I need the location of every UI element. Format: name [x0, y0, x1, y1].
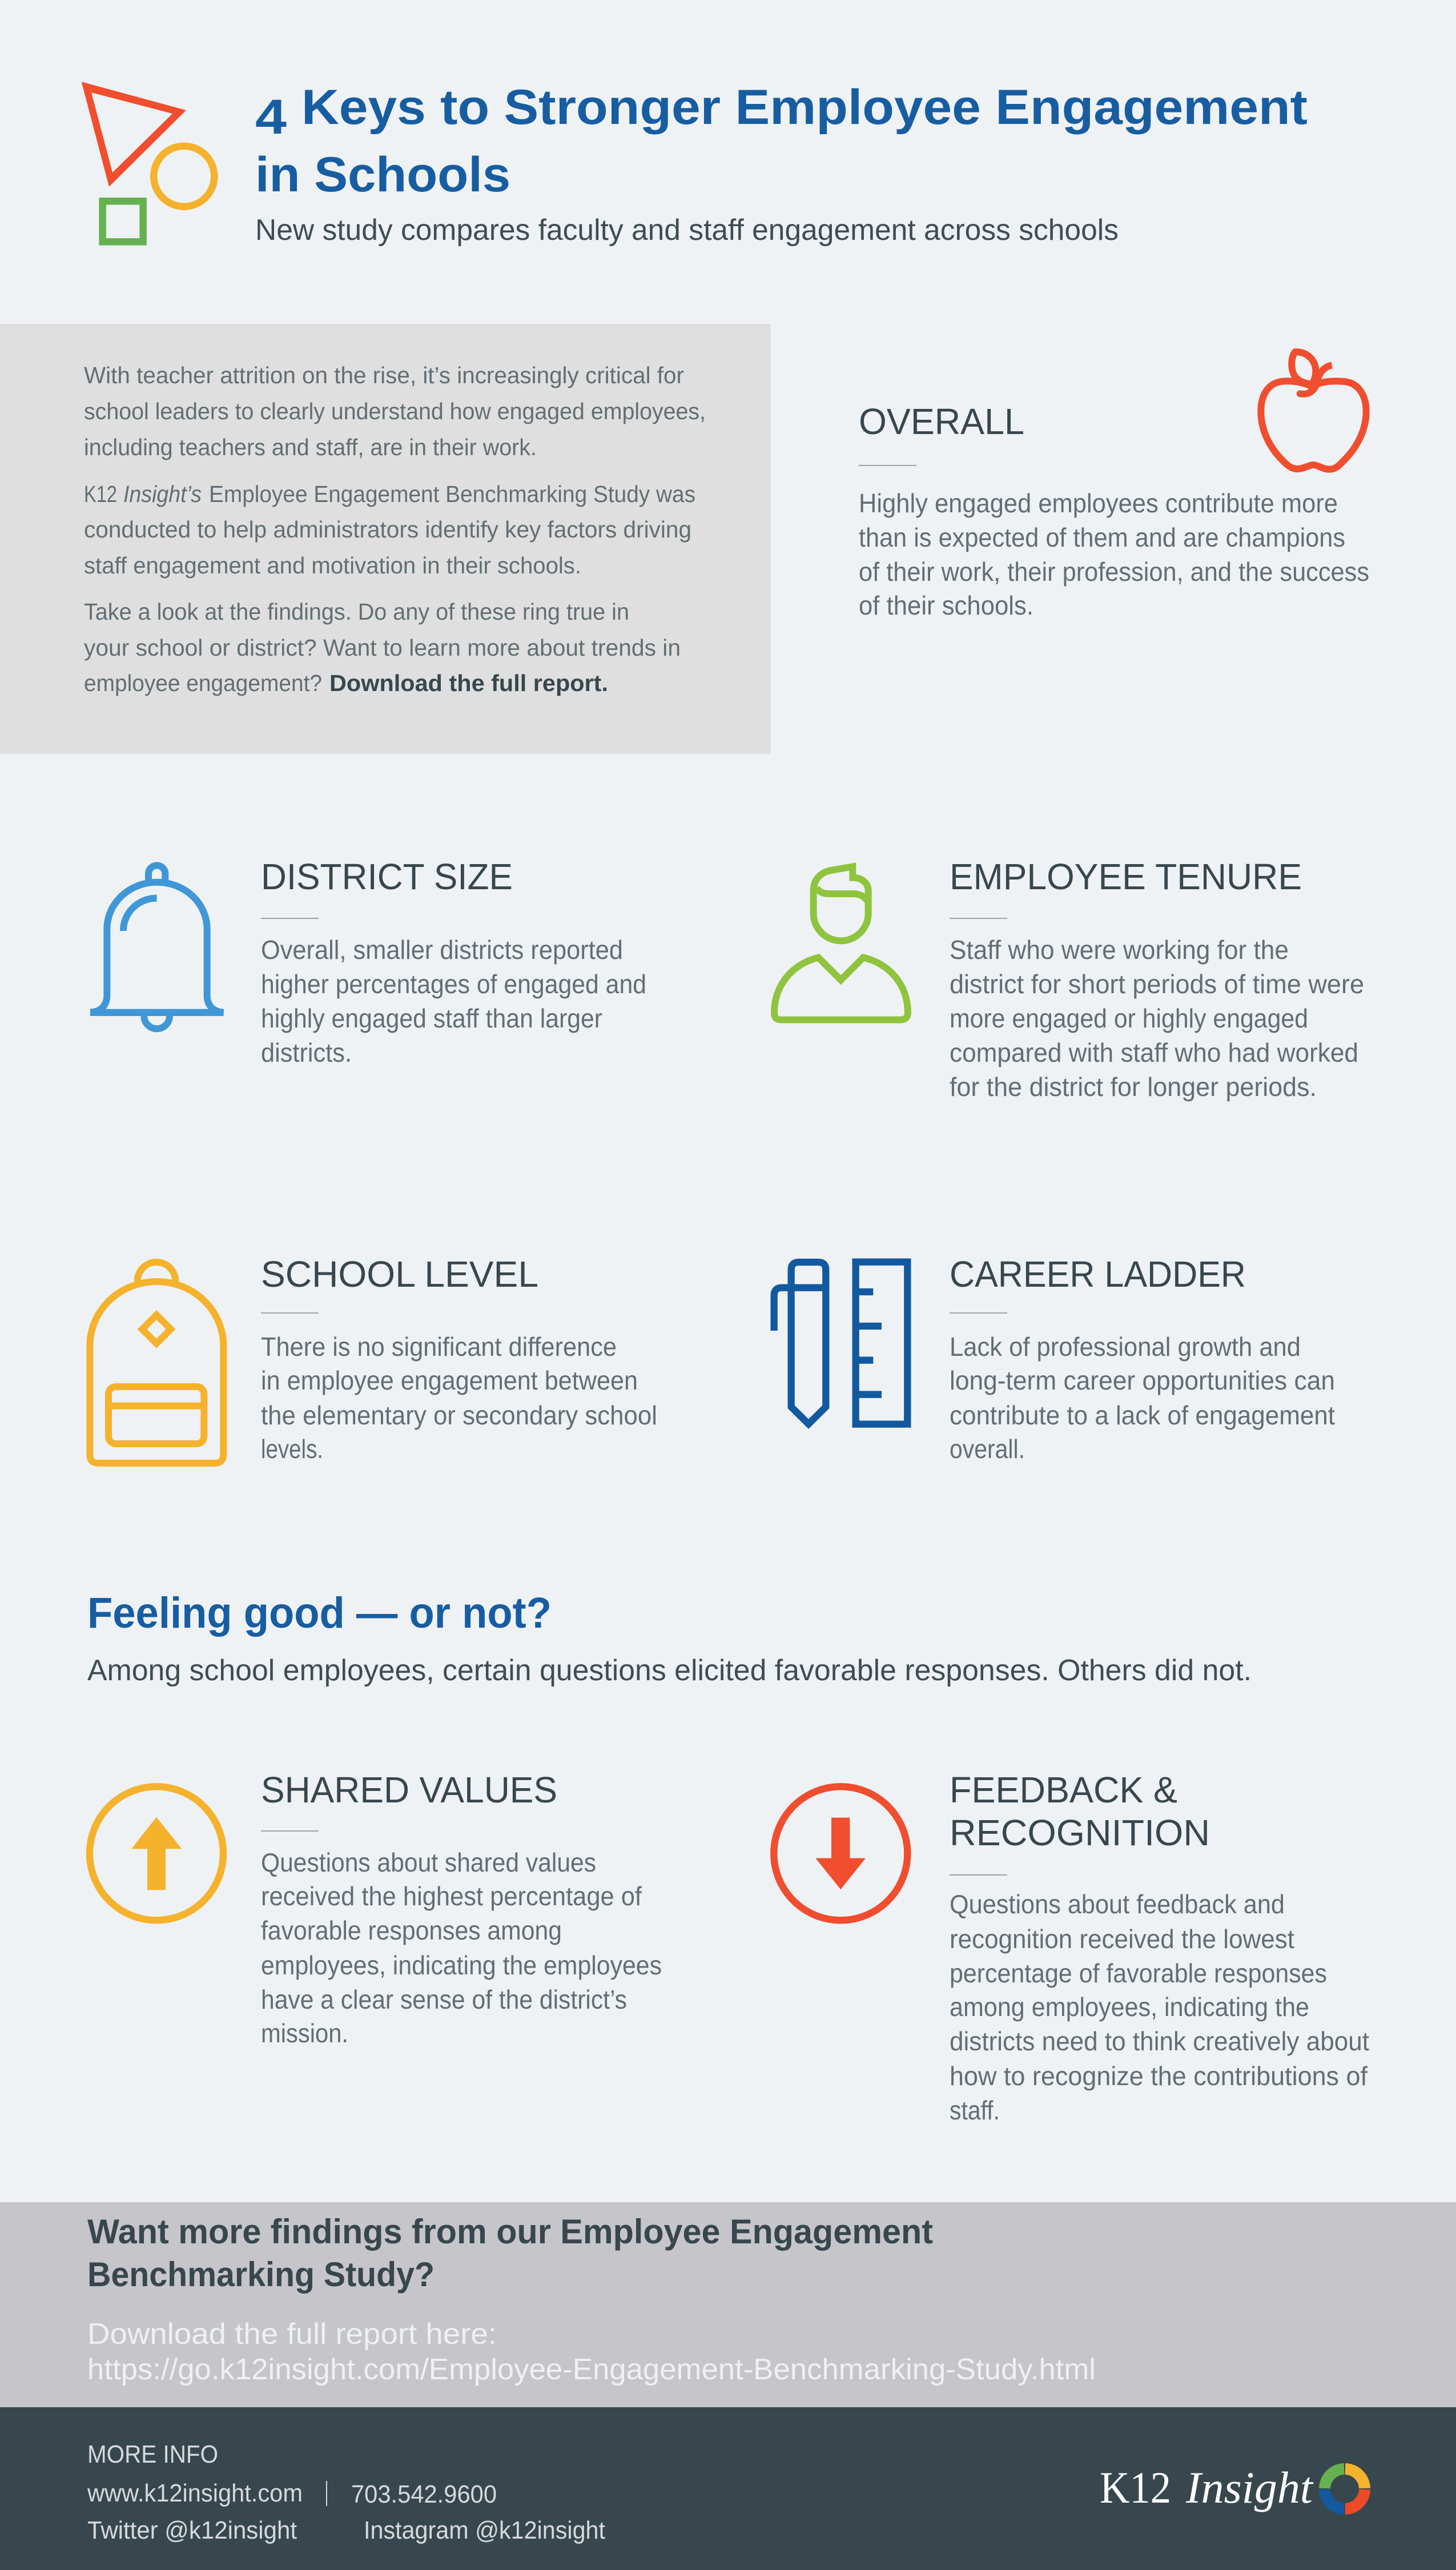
text: career ladder: Lack of professional growth and: [950, 1332, 1301, 1362]
icon: bell: [90, 865, 224, 1029]
intro paragraph 3: Download the full report.: [329, 670, 608, 696]
heading: feedback and recognition: RECOGNITION: [950, 1812, 1210, 1853]
footer contact details: www.k12insight.com: [87, 2479, 303, 2507]
footer contact details: Instagram @k12insight: [364, 2516, 605, 2544]
text: school level: levels.: [261, 1434, 323, 1464]
text: district size: districts.: [261, 1038, 352, 1067]
text: feedback and recognition: [950, 1889, 1369, 2125]
logo: K12 Insight: [1100, 2463, 1365, 2512]
text: shared values: favorable responses among: [261, 1916, 562, 1945]
text: shared values: received the highest percentage of: [261, 1881, 642, 1911]
heading: shared values: SHARED VALUES: [261, 1769, 557, 1810]
heading: school level: SCHOOL LEVEL: [261, 1254, 538, 1295]
text: feedback and recognition: percentage of favorable responses: [950, 1958, 1327, 1988]
intro paragraph 2: K12: [84, 481, 117, 507]
heading: career ladder: CAREER LADDER: [950, 1254, 1246, 1295]
icon: apple: [1261, 352, 1366, 469]
call to action heading: Want more findings from our Employee Engagement: [87, 2212, 933, 2251]
text: employee tenure: Staff who were working for the: [950, 935, 1289, 965]
panel: footer: [0, 2407, 1456, 2570]
text: feedback and recognition: how to recognize the contributions of: [950, 2061, 1367, 2091]
text: feedback and recognition: districts need to think creatively about: [950, 2026, 1369, 2056]
section heading: feeling good: Feeling good — or not?: [87, 1589, 552, 1637]
icon: person: [774, 866, 908, 1020]
call to action link: https://go.k12insight.com/Employee-Engagement-Benchmarking-Study.html: [87, 2353, 1096, 2386]
heading: employee tenure: EMPLOYEE TENURE: [950, 856, 1302, 897]
text: district size: highly engaged staff than larger: [261, 1003, 602, 1033]
intro paragraph 2: [84, 481, 695, 579]
text: employee tenure: compared with staff who had worked: [950, 1038, 1358, 1067]
text: feedback and recognition: recognition received the lowest: [950, 1924, 1294, 1954]
panel: intro: [0, 324, 771, 754]
footer contact details: MORE INFO: [87, 2440, 218, 2468]
text: shared values: Questions about shared values: [261, 1848, 596, 1877]
text: employee tenure: more engaged or highly engaged: [950, 1003, 1308, 1033]
panel: overall: [859, 352, 1369, 620]
call to action link: [87, 2318, 1096, 2386]
footer contact details: Twitter @k12insight: [87, 2516, 297, 2544]
text: career ladder: [950, 1332, 1335, 1464]
text: employee tenure: for the district for longer periods.: [950, 1072, 1317, 1102]
intro paragraph 1: [84, 362, 706, 460]
intro paragraph 2: staff engagement and motivation in their schools.: [84, 552, 581, 579]
text: school level: the elementary or secondary school: [261, 1400, 657, 1430]
intro paragraph 1: including teachers and staff, are in their work.: [84, 434, 537, 460]
intro paragraph 3: Take a look at the findings. Do any of these ring true in: [84, 599, 629, 625]
icon: backpack: [90, 1262, 223, 1463]
panel: career ladder: [774, 1254, 1335, 1464]
panel: feedback and recognition: [774, 1769, 1369, 2125]
intro paragraph 3: employee engagement?: [84, 670, 322, 696]
intro paragraph 2: Employee Engagement Benchmarking Study was: [209, 481, 695, 507]
text: shared values: have a clear sense of the district’s: [261, 1985, 627, 2014]
text: career ladder: overall.: [950, 1434, 1025, 1464]
text: employee tenure: district for short periods of time were: [950, 969, 1364, 999]
intro paragraph 1: With teacher attrition on the rise, it’s increasingly critical for: [84, 362, 684, 388]
text: overall: than is expected of them and are champions: [859, 523, 1345, 552]
title: [255, 80, 1308, 202]
text: district size: higher percentages of engaged and: [261, 969, 646, 999]
heading: feedback and recognition: [950, 1769, 1210, 1853]
text: shared values: mission.: [261, 2018, 348, 2048]
logo: K12 Insight: K12: [1100, 2463, 1171, 2512]
call to action link: Download the full report here:: [87, 2318, 497, 2351]
text: overall: [859, 488, 1369, 620]
subtitle: New study compares faculty and staff engagement across schools: [255, 214, 1119, 247]
heading: feedback and recognition: FEEDBACK &: [950, 1769, 1177, 1810]
intro paragraph 2: conducted to help administrators identify key factors driving: [84, 516, 691, 543]
panel: shared values: [90, 1769, 662, 2048]
section subheading: Among school employees, certain questions elicited favorable responses. Others did not.: [87, 1654, 1252, 1687]
icon: triangle, circle and square logo shapes: [82, 82, 214, 242]
call to action heading: [87, 2212, 933, 2294]
text: career ladder: contribute to a lack of engagement: [950, 1400, 1335, 1430]
panel: district size: [90, 856, 646, 1067]
panel: employee tenure: [774, 856, 1364, 1102]
text: school level: in employee engagement between: [261, 1366, 638, 1395]
intro paragraph 1: school leaders to clearly understand how engaged employees,: [84, 398, 706, 424]
icon: down arrow in circle: [774, 1786, 907, 1920]
intro paragraph 3: your school or district? Want to learn more about trends in: [84, 635, 681, 661]
heading: overall: OVERALL: [859, 401, 1024, 442]
text: overall: of their schools.: [859, 591, 1033, 620]
call to action heading: Benchmarking Study?: [87, 2255, 435, 2294]
title: in Schools: [255, 147, 510, 202]
footer contact details: [87, 2440, 605, 2544]
intro paragraph 3: [84, 599, 681, 696]
title: Keys to Stronger Employee Engagement: [301, 80, 1308, 135]
logo: K12 Insight: Insight: [1185, 2463, 1314, 2512]
text: district size: Overall, smaller districts reported: [261, 935, 623, 965]
text: feedback and recognition: Questions about feedback and: [950, 1889, 1285, 1919]
text: shared values: [261, 1848, 662, 2048]
title: 4: [255, 90, 287, 144]
intro paragraph 2: Insight’s: [123, 481, 202, 507]
text: feedback and recognition: among employees, indicating the: [950, 1992, 1309, 2022]
text: employee tenure: [950, 935, 1364, 1102]
icon: up arrow in circle: [90, 1786, 223, 1920]
text: shared values: employees, indicating the employees: [261, 1950, 662, 1980]
icon: pen and ruler: [774, 1262, 907, 1424]
heading: district size: DISTRICT SIZE: [261, 856, 513, 897]
panel: school level: [90, 1254, 657, 1464]
text: overall: Highly engaged employees contribute more: [859, 488, 1338, 518]
text: overall: of their work, their profession, and the success: [859, 557, 1369, 587]
text: school level: [261, 1332, 657, 1464]
text: career ladder: long-term career opportunities can: [950, 1366, 1335, 1395]
text: district size: [261, 935, 646, 1067]
panel: call to action: [0, 2202, 1456, 2407]
text: feedback and recognition: staff.: [950, 2095, 1000, 2125]
footer contact details: 703.542.9600: [351, 2480, 497, 2508]
text: school level: There is no significant difference: [261, 1332, 617, 1362]
